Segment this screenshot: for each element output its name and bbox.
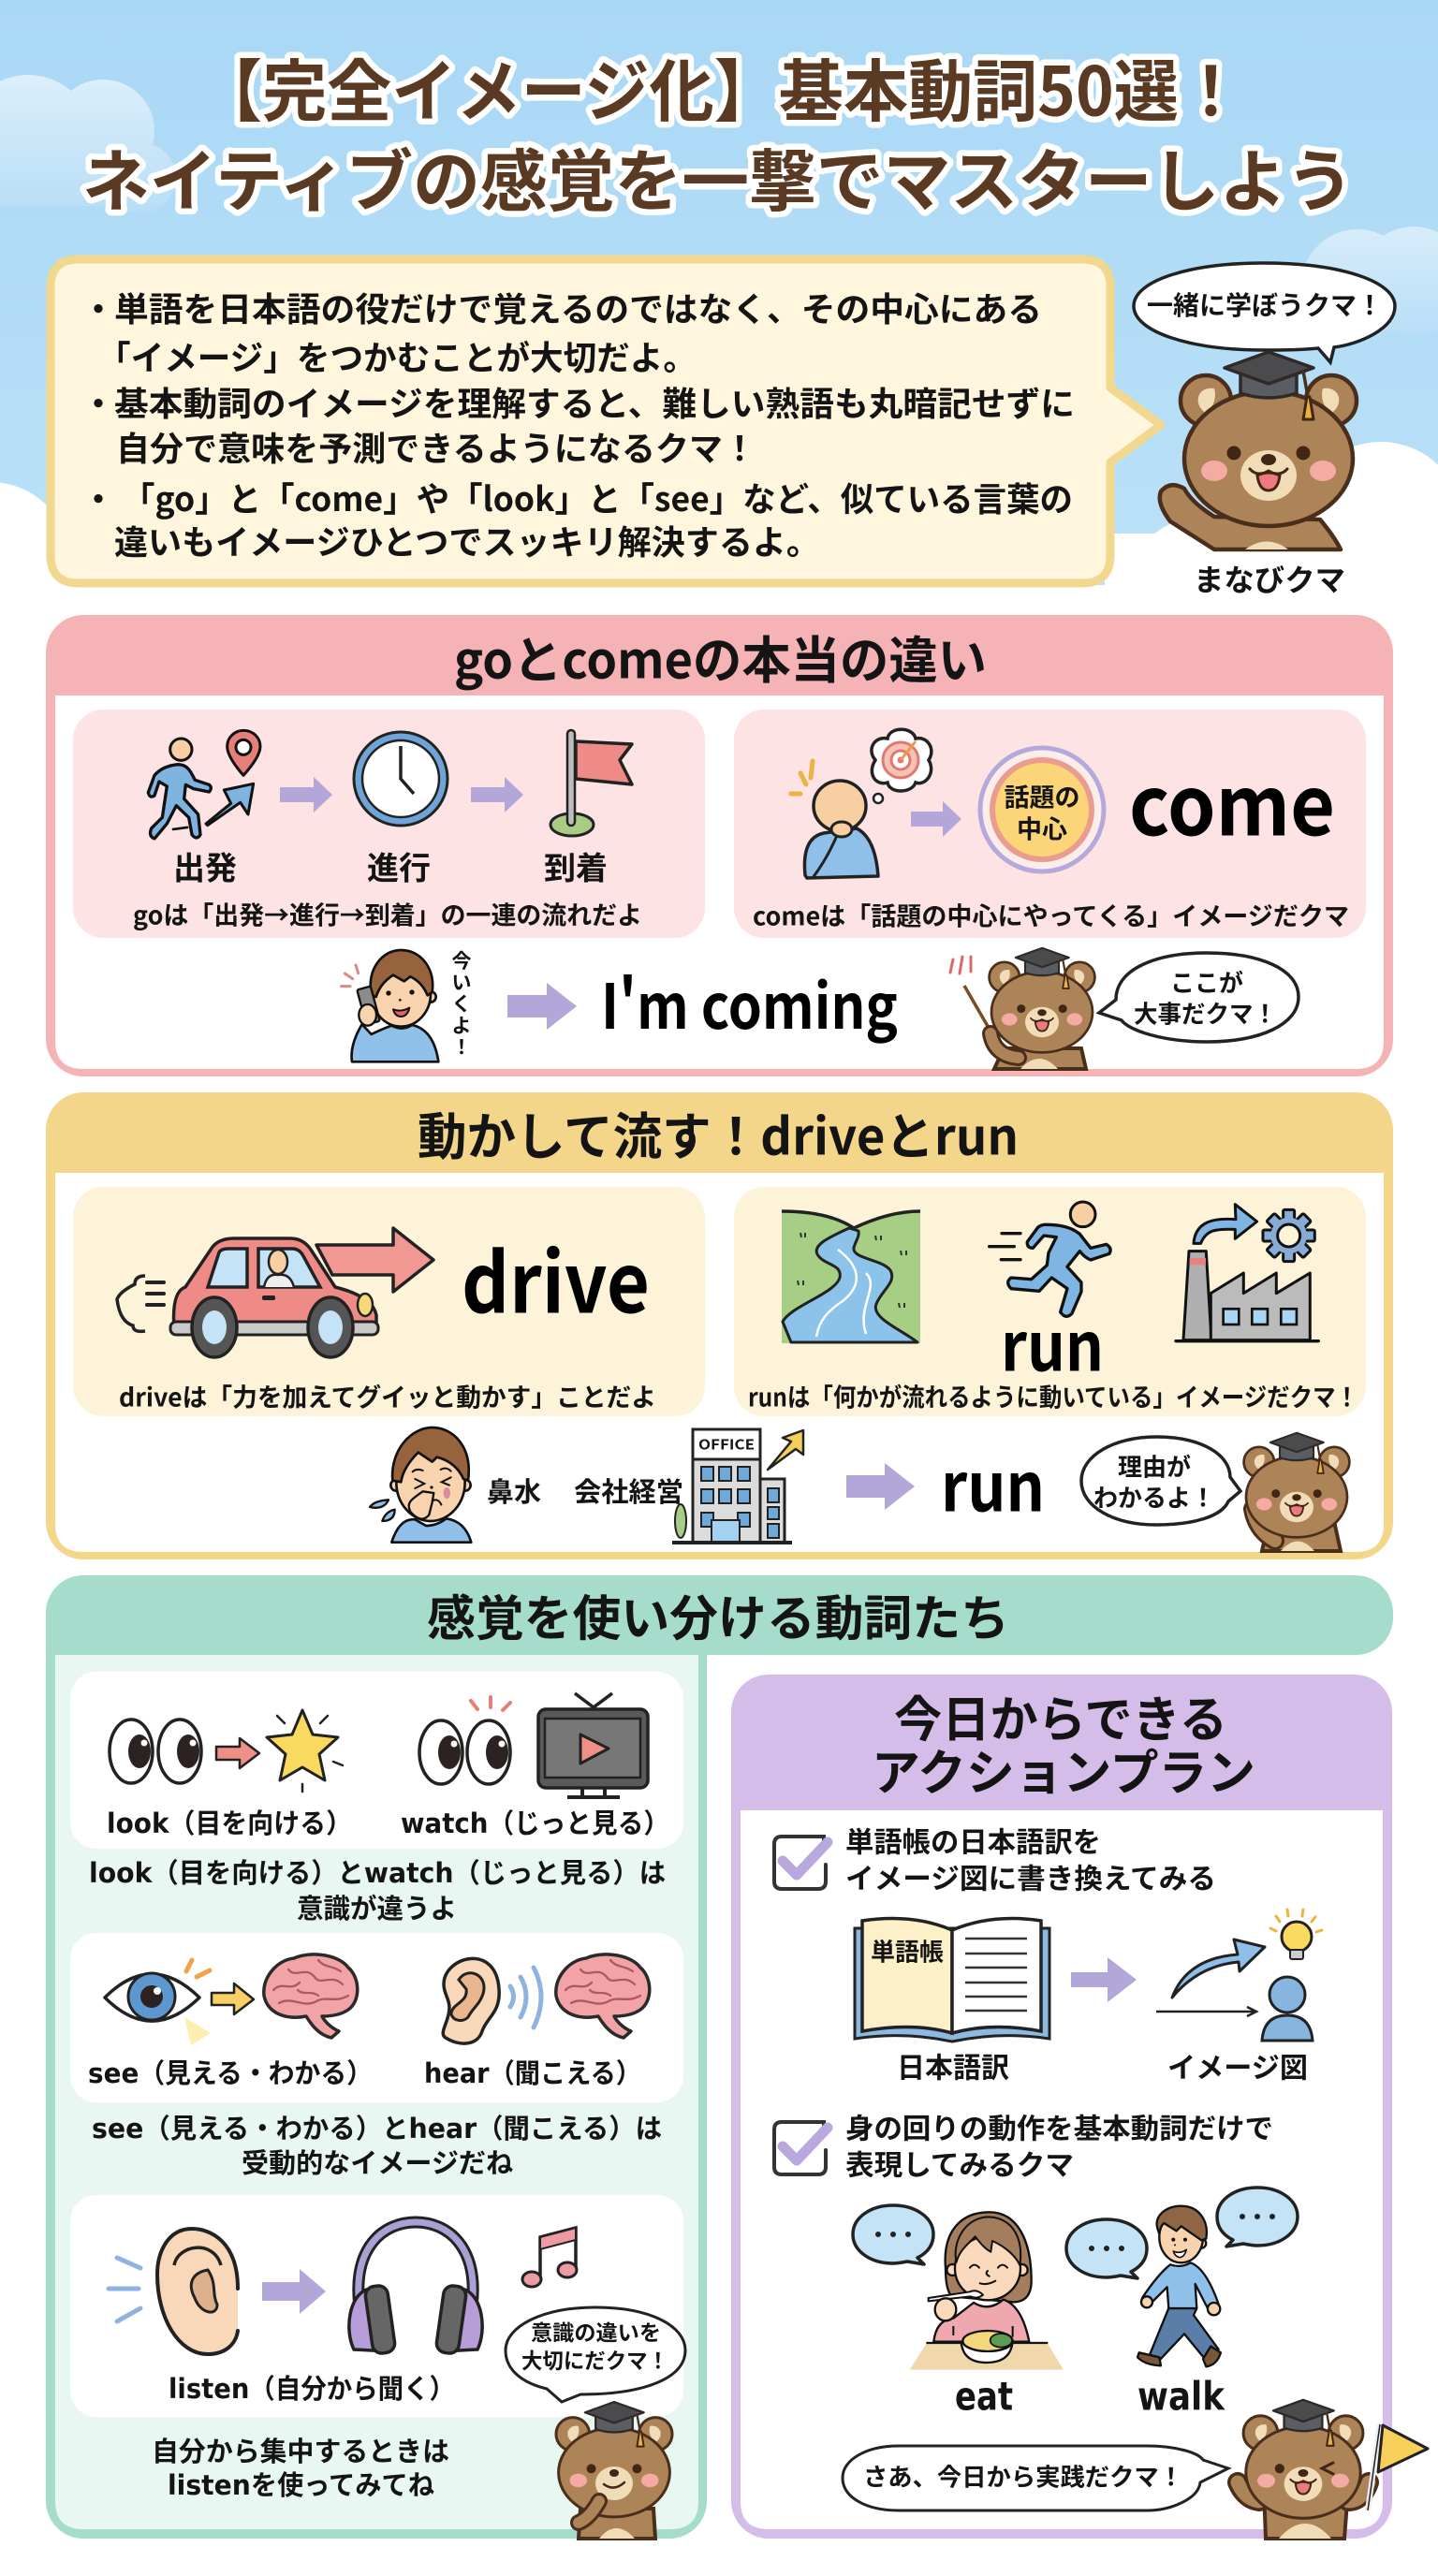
label: listen: listen（自分から聞く） (169, 2373, 455, 2405)
title: 【完全イメージ化】基本動詞50選！ (198, 37, 1243, 135)
speech bubble: start today: さあ、今日から実践だクマ！ (863, 2458, 1183, 2494)
icon: boy with runny nose (370, 1427, 471, 1543)
mascot: waving bear (1244, 1433, 1349, 1551)
speech bubble: start today (843, 2446, 1228, 2510)
vertical speech: ！ (451, 1032, 472, 1061)
icon: star (267, 1710, 343, 1792)
arrow (280, 777, 332, 812)
icon: runner (990, 1202, 1110, 1316)
icon: topic center: 中心 (1017, 809, 1067, 846)
icon: music note (522, 2228, 577, 2287)
speech bubble: awareness (506, 2307, 685, 2402)
icon: eyes watch (419, 1697, 510, 1784)
icon: sound rays (109, 2258, 140, 2321)
icon: ear (157, 2229, 238, 2354)
arrow (212, 1983, 254, 2014)
panel: drive and run (46, 1092, 1393, 1559)
caption: comeは「話題の中心にやってくる」イメージだクマ (753, 897, 1349, 932)
bullet list: ・ (81, 473, 115, 521)
label: see: see（見える・わかる） (88, 2057, 373, 2089)
icon: eye (105, 1960, 211, 2045)
vertical speech: 今 (451, 946, 472, 974)
speech bubble: important: 大事だクマ！ (1134, 996, 1277, 1030)
icon: car (117, 1228, 433, 1357)
icon: speech bubble (1066, 2219, 1147, 2278)
title: ネイティブの感覚を一撃でマスターしよう (82, 127, 1354, 225)
speech bubble: study together: 一緒に学ぼうクマ！ (1147, 285, 1383, 323)
action 2 text: 身の回りの動作を基本動詞だけで (845, 2114, 1273, 2145)
bullet list: 「イメージ」をつかむことが大切だよ。 (97, 331, 697, 380)
heading: 今日からできる (894, 1681, 1227, 1750)
vertical speech: く (451, 989, 472, 1017)
icon: river (782, 1211, 920, 1343)
bullet list: ・ (81, 283, 115, 331)
action 1 text: イメージ図に書き換えてみる (845, 1863, 1216, 1896)
icon: ear (443, 1958, 499, 2043)
icon: eating woman (910, 2212, 1064, 2370)
card: look and watch (70, 1672, 683, 1849)
panel: go and come (46, 615, 1393, 1076)
text: look vs watch (89, 1857, 666, 1925)
vertical speech (451, 946, 472, 1061)
caption: driveは「力を加えてグイッと動かす」ことだよ (119, 1378, 656, 1413)
text: see and hear: 受動的なイメージだね (242, 2147, 513, 2179)
caption: runは「何かが流れるように動いている」イメージだクマ！ (748, 1378, 1358, 1413)
heading (872, 1681, 1255, 1805)
action 1 text: 単語帳の日本語訳を (845, 1827, 1101, 1859)
word: run: run (1001, 1292, 1104, 1391)
text: see and hear: see（見える・わかる）とhear（聞こえる）は (92, 2113, 662, 2144)
heading: アクションプラン (872, 1734, 1255, 1805)
text: look vs watch: 意識が違うよ (297, 1893, 457, 1925)
vertical speech: い (451, 968, 472, 996)
bullet list: 「go」と「come」や「look」と「see」など、似ている言葉の (122, 473, 1073, 521)
bullet list: 違いもイメージひとつでスッキリ解決するよ。 (114, 516, 820, 564)
bullet list: ・ (81, 377, 115, 426)
speech bubble: reason: わかるよ！ (1093, 1479, 1215, 1515)
arrow (846, 1463, 915, 1510)
card: go (73, 710, 705, 938)
heading: 感覚を使い分ける動詞たち (427, 1580, 1009, 1649)
mascot: flag bear (1238, 2400, 1428, 2539)
intro callout (51, 259, 1161, 583)
label: company management: 会社経営 (574, 1471, 683, 1510)
heading: goとcomeの本当の違い (454, 620, 987, 693)
icon: speech bubble (1217, 2188, 1298, 2247)
arrow (911, 801, 961, 837)
icon: topic center: 話題の (1004, 777, 1080, 814)
card: drive (73, 1187, 705, 1416)
speech bubble: reason (1081, 1437, 1240, 1525)
speech bubble: reason: 理由が (1118, 1449, 1191, 1483)
label: runny nose: 鼻水 (487, 1471, 541, 1510)
word: walk: walk (1137, 2374, 1225, 2419)
word: eat: eat (955, 2374, 1013, 2419)
icon: office building (672, 1429, 803, 1543)
action 2 text (845, 2114, 1273, 2183)
labels (173, 842, 608, 889)
heading: 動かして流す！driveとrun (418, 1095, 1019, 1170)
speech bubble: study together (1134, 263, 1395, 362)
title (82, 37, 1354, 225)
labels: 出発 (173, 842, 237, 889)
icon: image diagram (1156, 1910, 1322, 2041)
icon: vocabulary book: 単語帳 (871, 1934, 944, 1968)
arrow (262, 2269, 326, 2314)
labels: 到着 (544, 842, 608, 889)
panel: action plan (731, 1675, 1428, 2539)
labels: 日本語訳 (897, 2052, 1009, 2086)
label: hear: hear（聞こえる） (424, 2057, 641, 2089)
icon: boy on phone (342, 950, 438, 1061)
icon: eyes look (110, 1720, 201, 1783)
labels: 進行 (367, 842, 431, 889)
speech bubble: important (1099, 953, 1299, 1042)
label: look: look（目を向ける） (107, 1808, 352, 1839)
mascot: teacher bear (950, 948, 1094, 1069)
arrow (507, 983, 577, 1030)
word: I'm coming: I'm coming (601, 958, 898, 1047)
word: run: run (941, 1432, 1045, 1531)
label: watch: watch（じっと見る） (401, 1808, 669, 1839)
icon: vocabulary book (855, 1919, 1049, 2042)
icon: flag (550, 730, 632, 836)
action 1 text (845, 1827, 1216, 1896)
speech bubble: awareness: 大切にだクマ！ (521, 2343, 668, 2375)
action 2 text: 表現してみるクマ (845, 2149, 1074, 2183)
icon: office building: OFFICE (698, 1434, 755, 1455)
mascot: manabi bear (1160, 352, 1357, 600)
arrow (216, 1738, 259, 1768)
card: see and hear (70, 1933, 683, 2102)
text: see and hear (92, 2113, 662, 2179)
speech bubble: awareness: 意識の違いを (531, 2315, 661, 2347)
word: come: come (1129, 741, 1335, 859)
vertical speech: よ (451, 1011, 472, 1039)
card: run (734, 1187, 1366, 1416)
icon: sound waves (510, 1968, 541, 2027)
bullet list: 基本動詞のイメージを理解すると、難しい熟語も丸暗記せずに (114, 377, 1075, 426)
mascot name: まなびクマ (1194, 557, 1345, 600)
icon: speech bubble (853, 2205, 933, 2264)
icon: walker and pin (148, 730, 260, 839)
icon: brain (556, 1954, 650, 2038)
panel: sense verbs (46, 1575, 1393, 2539)
word: drive: drive (462, 1219, 650, 1337)
text: listen advice: 自分から集中するときは (152, 2436, 449, 2467)
checkbox 2 (774, 2122, 828, 2174)
checkbox 1 (774, 1837, 828, 1889)
text: look vs watch: look（目を向ける）とwatch（じっと見る）は (89, 1857, 666, 1889)
icon: thinking person (791, 729, 932, 878)
icon: factory and gear (1176, 1205, 1318, 1341)
icon: clock (354, 732, 448, 826)
text: listen advice (152, 2436, 449, 2501)
bullet list (81, 283, 1075, 564)
bullet list: 自分で意味を予測できるようになるクマ！ (116, 422, 756, 471)
icon: walking boy (1137, 2206, 1221, 2366)
arrow (1071, 1957, 1137, 2002)
icon: brain (264, 1954, 358, 2038)
mascot: thinking bear (556, 2402, 672, 2539)
text: listen advice: listenを使ってみてね (168, 2469, 434, 2501)
card: come (734, 710, 1366, 938)
bullet list: 単語を日本語の役だけで覚えるのではなく、その中心にある (114, 283, 1042, 331)
icon: tv (538, 1693, 648, 1797)
arrow (471, 777, 523, 812)
caption: goは「出発→進行→到着」の一連の流れだよ (133, 895, 642, 932)
icon: headphones (349, 2222, 482, 2354)
labels (897, 2052, 1308, 2086)
card: listen (70, 2195, 683, 2417)
icon: topic center (980, 748, 1104, 871)
speech bubble: important: ここが (1170, 964, 1243, 1000)
labels: イメージ図 (1167, 2052, 1308, 2086)
